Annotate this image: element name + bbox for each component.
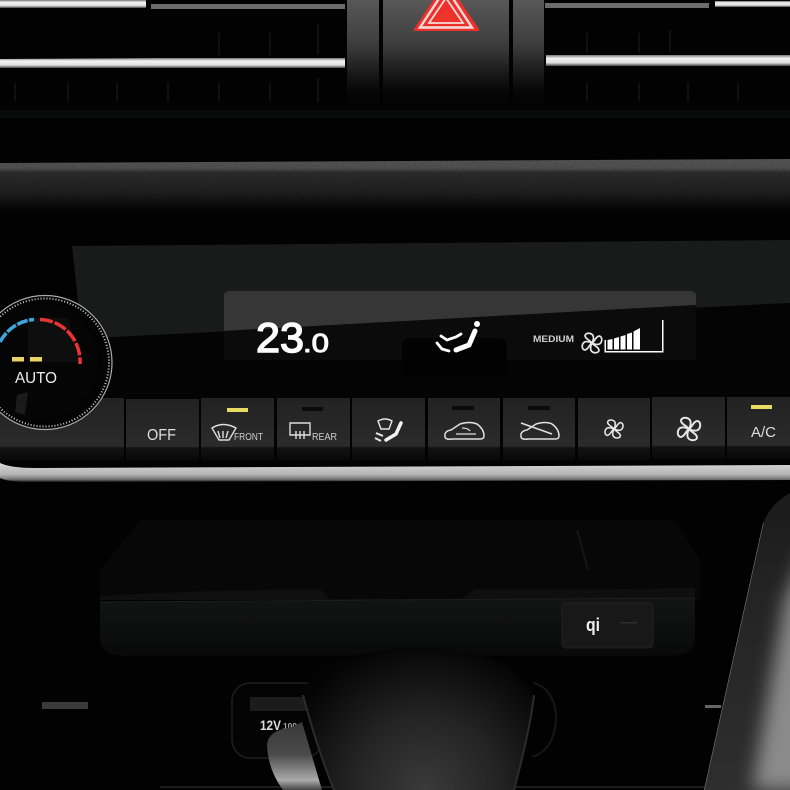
button: off: OFF: [147, 427, 176, 444]
right knob bezel: [532, 683, 556, 757]
button row: [0, 397, 790, 460]
icon: hazard triangle: [414, 0, 479, 31]
wireless charging button: qi: [586, 615, 600, 635]
display background: [224, 291, 696, 378]
dial indicators: [12, 357, 42, 362]
button: front defrost: [201, 398, 274, 460]
button: recirculate: [428, 398, 500, 460]
button: fan up: [652, 397, 725, 459]
button: windshield airflow: [352, 398, 425, 460]
button: rear defrost: REAR: [312, 431, 337, 443]
wireless charging button: [562, 603, 653, 648]
air vents: [0, 0, 790, 118]
12V socket: 12V: [260, 717, 282, 733]
button: air conditioning: A/C: [751, 424, 776, 441]
temperature readout: 23: [256, 314, 304, 361]
red temperature arc: [40, 320, 80, 364]
screen panel: [72, 240, 790, 398]
lower console: [42, 520, 721, 790]
hazard switch housing: [347, 0, 544, 108]
blue temperature arc: [0, 320, 34, 342]
icon: fan: [582, 333, 602, 353]
dial label: AUTO: [15, 370, 57, 387]
stray light bars: [42, 702, 721, 788]
12V socket: 100: [283, 722, 298, 731]
temperature dial: [0, 296, 112, 430]
button: rear defrost: [277, 398, 350, 460]
button: air conditioning: [727, 397, 790, 459]
temperature readout: [256, 314, 329, 361]
button: front defrost: FRONT: [234, 431, 263, 443]
gear shifter collar: [267, 722, 322, 790]
temperature readout: .0: [303, 328, 329, 358]
tray front: [100, 598, 695, 656]
button: off: [126, 399, 199, 460]
button: fresh air: [503, 398, 575, 460]
12V socket: [232, 683, 322, 758]
leather dash band: [0, 159, 790, 216]
charging tray: [100, 520, 700, 600]
chrome trim: [0, 463, 790, 482]
fan level label: MEDIUM: [533, 334, 574, 345]
button: fan down: [578, 398, 650, 460]
gear knob: [303, 647, 534, 790]
icon: airflow seat: [437, 321, 480, 351]
fan speed bars: [604, 320, 664, 352]
silver console strip: [704, 493, 790, 790]
